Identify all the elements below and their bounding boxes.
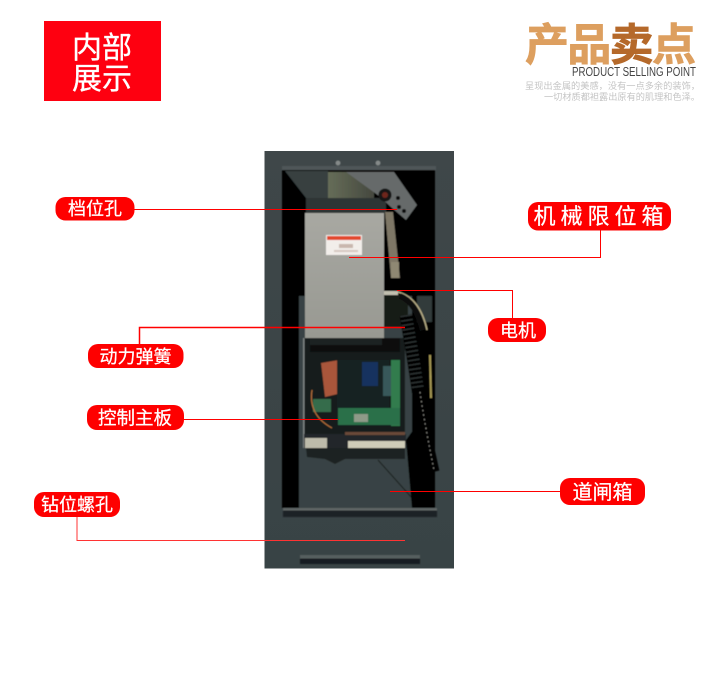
lower lip: [283, 508, 437, 510]
callout: 道闸箱: 道闸箱: [572, 481, 632, 504]
recess: [282, 160, 437, 564]
corrugated tube: [406, 315, 433, 472]
callout: 档位孔: 档位孔: [68, 199, 122, 219]
limit bracket: [346, 172, 417, 220]
brand heading: 产品卖点: 产品卖点: [525, 21, 696, 70]
left black column: [283, 296, 299, 508]
callout: 控制主板: 控制主板: [98, 408, 172, 428]
heading badge: 内部展示: 展示: [72, 63, 132, 96]
callout: 动力弹簧: [88, 328, 405, 368]
relay: [321, 360, 342, 397]
callout: 钻位螺孔: [34, 492, 405, 540]
callout: 机械限位箱: 机械限位箱: [533, 204, 669, 229]
motor: [384, 291, 398, 295]
arm: [385, 212, 400, 278]
callout: 道闸箱: [390, 478, 645, 505]
grey mechanism cover: [305, 213, 384, 338]
control board enclosure: [303, 338, 405, 448]
brand heading: 产品卖点: 一切材质都袒露出原有的肌理和色泽。: [544, 91, 700, 102]
callout: 档位孔: [56, 197, 397, 220]
PCB: [337, 360, 389, 408]
upper diagonal plate: [285, 171, 328, 198]
brand heading: 产品卖点: 呈现出金属的美感，没有一点多余的装饰，: [525, 80, 700, 91]
right black wedge: [406, 400, 435, 508]
callout: 钻位螺孔: 钻位螺孔: [41, 495, 113, 515]
heading badge: 内部展示: [44, 21, 161, 101]
lower bracket: [300, 555, 420, 558]
rear panel: [299, 296, 412, 508]
mounting bar: [306, 198, 386, 213]
heading badge: 内部展示: 内部: [72, 32, 132, 65]
callout: 机械限位箱: [349, 202, 671, 258]
callout: 控制主板: [87, 405, 338, 430]
photo: barrier gate cabinet interior: [264, 151, 454, 568]
bottom wiring tray: [304, 434, 406, 448]
screws: [336, 160, 340, 166]
warning label: [326, 235, 362, 255]
callout: 电机: 电机: [500, 321, 536, 341]
callout: 动力弹簧: 动力弹簧: [100, 347, 172, 367]
cabinet body: [264, 151, 454, 568]
callout: 电机: [397, 290, 546, 342]
brand heading: 产品卖点: [525, 21, 700, 102]
